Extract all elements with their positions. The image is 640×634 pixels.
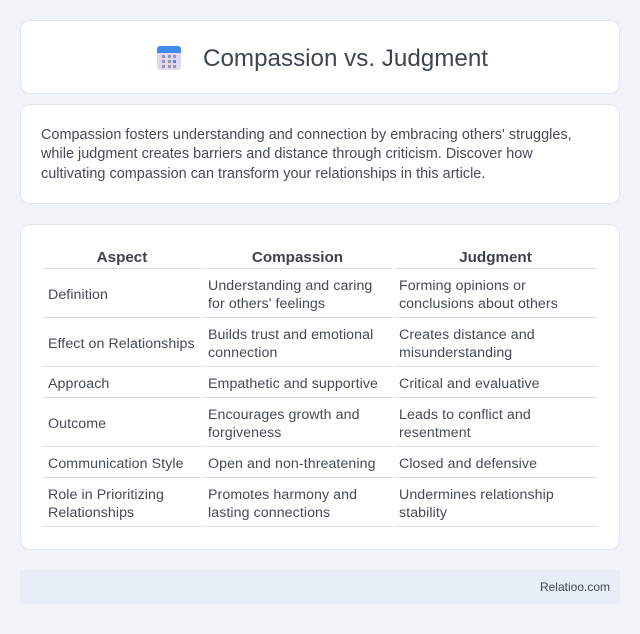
table header: Judgment: Judgment [459,249,532,266]
row: Role in Prioritizing Relationships: stability [399,505,447,521]
row: Effect on Relationships: Effect on Relationships [48,336,195,352]
row: Effect on Relationships: Creates distance and [399,327,535,343]
panel: table card [20,224,620,550]
panel: introduction [20,104,620,204]
row: Definition [48,278,558,312]
row: Effect on Relationships: connection [208,345,277,361]
row: Role in Prioritizing Relationships: Role in Prioritizing [48,487,164,503]
row: Role in Prioritizing Relationships: lasting connections [208,505,330,521]
table header: Aspect: Aspect [97,249,147,266]
row: Effect on Relationships: misunderstanding [399,345,512,361]
footer credit: Relatioo.com [540,580,610,594]
row: Role in Prioritizing Relationships [48,487,554,521]
row: Outcome: Encourages growth and [208,407,360,423]
panel: title card [20,20,620,94]
row: Outcome: forgiveness [208,425,281,441]
row: Definition: for others' feelings [208,296,325,312]
row: Role in Prioritizing Relationships: Promotes harmony and [208,487,357,503]
intro text: while judgment creates barriers and distance through criticism. Discover how [41,146,533,162]
intro text [41,126,572,182]
row: Approach: Empathetic and supportive [208,376,378,392]
row: Approach [48,376,540,392]
row: Outcome [48,407,531,441]
intro text: Compassion fosters understanding and connection by embracing others' struggles, [41,126,572,142]
row: Approach: Critical and evaluative [399,376,540,392]
row: Communication Style: Closed and defensive [399,456,537,472]
row: Communication Style [48,456,537,472]
intro text: cultivating compassion can transform your relationships in this article. [41,166,485,182]
row: Communication Style: Communication Style [48,456,184,472]
table header: Compassion: Compassion [252,249,343,266]
row: Role in Prioritizing Relationships: Undermines relationship [399,487,554,503]
row: Outcome: Outcome [48,416,106,432]
row: Outcome: resentment [399,425,471,441]
row: Definition: conclusions about others [399,296,558,312]
row: Definition: Forming opinions or [399,278,526,294]
title: Compassion vs. Judgment [203,45,488,72]
row: Definition: Definition [48,287,108,303]
row: Definition: Understanding and caring [208,278,372,294]
row: Role in Prioritizing Relationships: Relationships [48,505,134,521]
icon: calendar [157,46,181,70]
footer bar [20,570,620,604]
row: Outcome: Leads to conflict and [399,407,531,423]
row: Effect on Relationships: Builds trust and emotional [208,327,373,343]
row: Effect on Relationships [48,327,535,361]
row: Approach: Approach [48,376,109,392]
row: Communication Style: Open and non-threatening [208,456,376,472]
